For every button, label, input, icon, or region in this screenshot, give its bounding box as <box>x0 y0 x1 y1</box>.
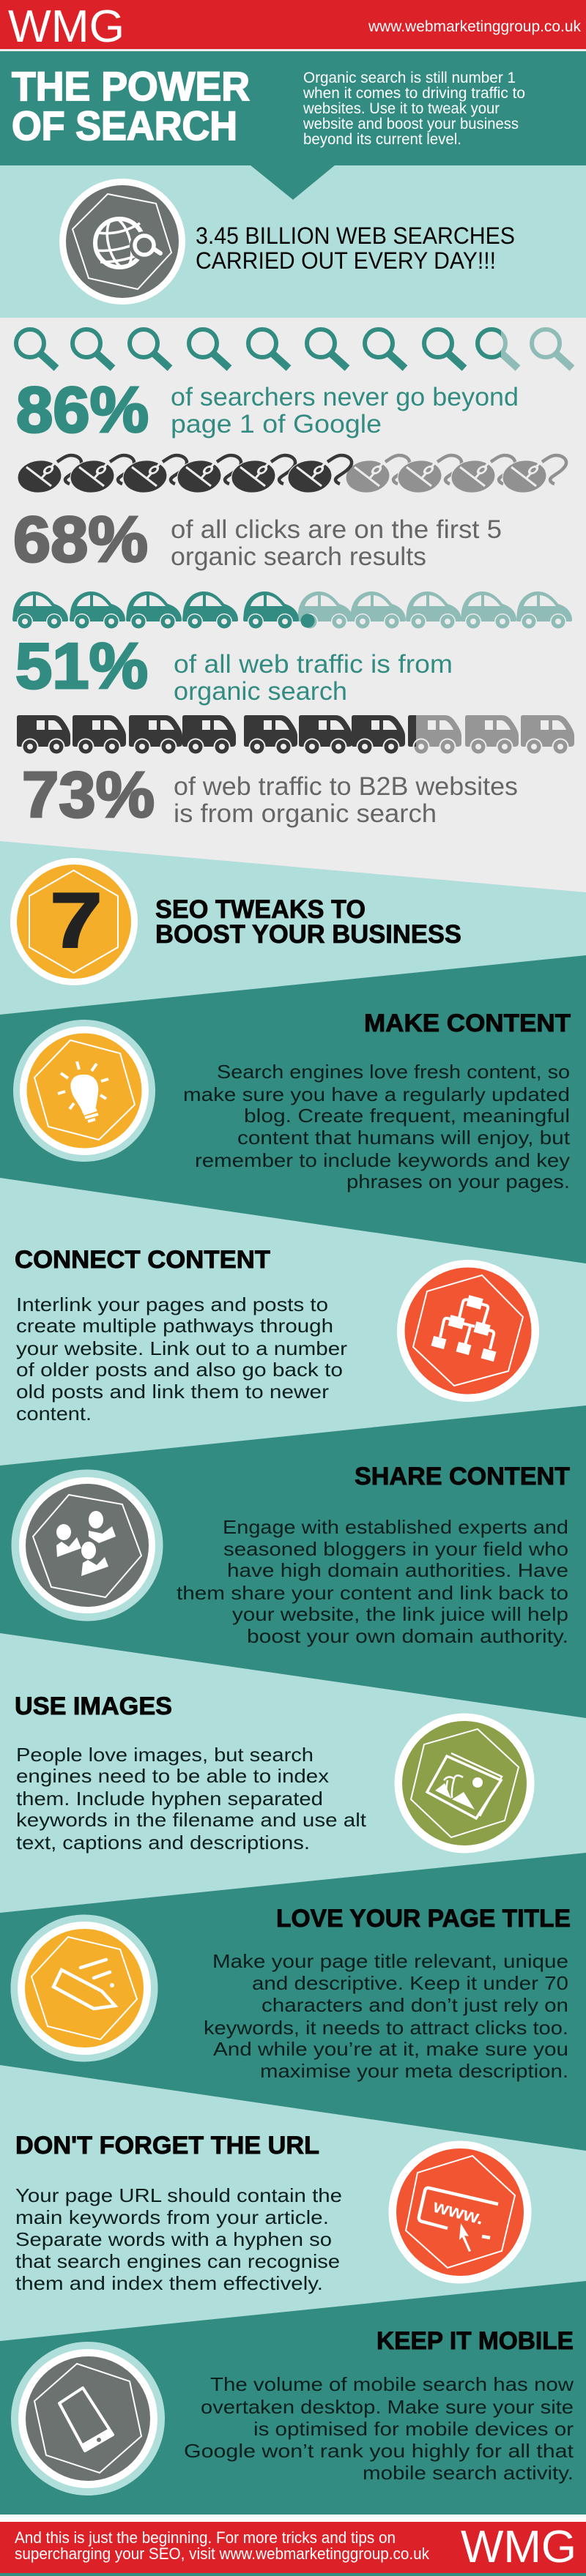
text: keep it mobile: is optimised for mobile devices or <box>253 2418 574 2440</box>
intro text: website and boost your business <box>303 116 519 132</box>
text: use images: engines need to be able to index <box>16 1765 329 1787</box>
footer text <box>15 2528 430 2563</box>
heading: don't forget the url: DON'T FORGET THE URL <box>15 2132 319 2159</box>
text: don't forget the url <box>15 2184 342 2294</box>
text: share content: have high domain authorities. Have <box>227 1559 568 1581</box>
logo: WMG: WMG <box>8 1 125 52</box>
panel: make content <box>0 955 586 1263</box>
stat: 51%: organic search <box>174 677 347 706</box>
footer text: And this is just the beginning. For more tricks and tips on <box>15 2528 396 2547</box>
panel: love your page title <box>0 1853 586 2151</box>
stat: 86% <box>16 373 519 446</box>
text: make content: remember to include keywords and key <box>195 1149 570 1171</box>
website address: www.webmarketinggroup.co.uk <box>368 18 581 35</box>
panel: title <box>0 51 586 200</box>
stat: 68%: of all clicks are on the first 5 <box>171 515 502 544</box>
text: love your page title <box>204 1950 568 2082</box>
text: use images: People love images, but search <box>16 1744 314 1766</box>
text: share content: seasoned bloggers in your field who <box>223 1538 568 1560</box>
text: use images: keywords in the filename and use alt <box>16 1809 367 1831</box>
heading: SEO tweaks: BOOST YOUR BUSINESS <box>155 920 461 949</box>
text: connect content: Interlink your pages and posts to <box>16 1293 328 1315</box>
stat: 86%: of searchers never go beyond <box>171 383 519 411</box>
intro text: beyond its current level. <box>303 131 461 148</box>
panel: keep it mobile <box>0 2281 586 2576</box>
text: don't forget the url: that search engines can recognise <box>15 2250 340 2272</box>
heading: make content: MAKE CONTENT <box>364 1009 571 1037</box>
stat: 68% <box>13 503 502 575</box>
text: connect content: content. <box>16 1403 92 1425</box>
text: don't forget the url: them and index them effectively. <box>15 2272 323 2294</box>
header bar <box>0 0 586 52</box>
text: keep it mobile: Google won’t rank you highly for all that <box>184 2440 574 2462</box>
text: love your page title: keywords, it needs to attract clicks too. <box>204 2017 568 2039</box>
panel: share content <box>0 1405 586 1718</box>
text: use images: them. Include hyphen separated <box>16 1788 323 1810</box>
stat: 73% <box>22 758 518 831</box>
text: make content <box>183 1061 571 1192</box>
panel: use images <box>15 1692 535 1853</box>
stat: 68%: 68% <box>13 503 148 575</box>
stat: 73%: of web traffic to B2B websites <box>174 772 518 801</box>
icon: number 7 badge <box>10 858 138 985</box>
icon: light bulb <box>13 1020 155 1162</box>
icon: people <box>12 1470 163 1621</box>
text: connect content: your website. Link out to a number <box>16 1337 347 1359</box>
heading: keep it mobile: KEEP IT MOBILE <box>377 2327 574 2355</box>
text: share content: your website, the link juice will help <box>232 1603 568 1625</box>
panel: web searches banner <box>0 165 586 318</box>
icon: sitemap <box>397 1260 539 1402</box>
footer logo: WMG: WMG <box>461 2522 576 2572</box>
text: love your page title: Make your page title relevant, unique <box>212 1950 568 1972</box>
heading: connect content: CONNECT CONTENT <box>15 1246 270 1274</box>
headline: 3.45 billion <box>196 223 515 274</box>
heading: love your page title: LOVE YOUR PAGE TITLE <box>276 1905 571 1933</box>
icon: smartphone <box>11 2342 165 2495</box>
text: love your page title: maximise your meta description. <box>260 2060 568 2082</box>
stat: 73%: 73% <box>22 758 155 831</box>
text: make content: Search engines love fresh content, so <box>217 1061 570 1083</box>
icon: tag pencil <box>10 1915 158 2061</box>
text: connect content: old posts and link them to newer <box>16 1381 329 1403</box>
icon row: vans 73% <box>17 715 574 755</box>
icon: www browser: www. <box>430 2195 486 2229</box>
text: keep it mobile: mobile search activity. <box>363 2462 574 2484</box>
text: share content: them share your content and link back to <box>177 1582 568 1604</box>
intro text <box>303 70 525 148</box>
stat: 86%: page 1 of Google <box>171 410 382 438</box>
text: love your page title: And while you’re at it, make sure you <box>213 2038 568 2060</box>
text: don't forget the url: Your page URL should contain the <box>15 2184 342 2206</box>
panel: don't forget the URL <box>15 2132 532 2294</box>
intro text: Organic search is still number 1 <box>303 70 516 86</box>
text: share content: boost your own domain authority. <box>247 1625 568 1647</box>
stat: 51% <box>15 630 453 706</box>
stat: 51%: of all web traffic is from <box>174 650 453 679</box>
icon row: computer mice 68% <box>16 455 566 495</box>
stat: 51%: 51% <box>15 630 148 702</box>
headline: 3.45 billion: 3.45 BILLION WEB SEARCHES <box>196 223 515 249</box>
text: connect content <box>16 1293 347 1425</box>
title <box>12 63 250 149</box>
text: keep it mobile <box>184 2373 574 2484</box>
text: love your page title: and descriptive. Keep it under 70 <box>252 1972 568 1994</box>
stat: 68%: organic search results <box>171 542 426 571</box>
stat: 73%: is from organic search <box>174 799 437 828</box>
text: share content: Engage with established experts and <box>223 1516 568 1538</box>
text: love your page title: characters and don’t just rely on <box>262 1994 568 2016</box>
text: connect content: create multiple pathways through <box>16 1315 333 1337</box>
text: don't forget the url: Separate words with a hyphen so <box>15 2228 332 2250</box>
intro text: websites. Use it to tweak your <box>303 100 500 117</box>
icon row: cars 51% <box>12 591 572 630</box>
text: make content: phrases on your pages. <box>346 1171 570 1192</box>
text: keep it mobile: The volume of mobile search has now <box>210 2373 574 2395</box>
text: share content <box>177 1516 568 1647</box>
intro text: when it comes to driving traffic to <box>303 85 525 102</box>
text: use images <box>16 1744 367 1853</box>
panel: light teal background of tips <box>0 841 586 2518</box>
headline: 3.45 billion: CARRIED OUT EVERY DAY!!! <box>196 247 496 274</box>
icon: number 7 badge: 7 <box>50 876 103 964</box>
panel: connect content <box>15 1246 539 1425</box>
footer <box>0 2515 586 2573</box>
text: don't forget the url: main keywords from your article. <box>15 2206 329 2228</box>
footer text: supercharging your SEO, visit www.webmarketinggroup.co.uk <box>15 2545 430 2563</box>
heading: use images: USE IMAGES <box>15 1692 172 1720</box>
text: connect content: of older posts and also go back to <box>16 1359 343 1381</box>
heading: SEO tweaks: SEO TWEAKS TO <box>155 895 366 924</box>
heading: share content: SHARE CONTENT <box>355 1463 570 1490</box>
text: make content: blog. Create frequent, meaningful <box>244 1105 570 1127</box>
text: make content: content that humans will enjoy, but <box>237 1127 571 1149</box>
icon: photo <box>394 1713 535 1853</box>
icon: globe search badge <box>59 179 185 305</box>
title: OF SEARCH <box>12 102 237 149</box>
title: THE POWER <box>12 63 250 109</box>
heading: SEO tweaks <box>155 895 461 949</box>
text: keep it mobile: overtaken desktop. Make sure your site <box>201 2396 574 2418</box>
text: use images: text, captions and descriptions. <box>16 1832 310 1853</box>
text: make content: make sure you have a regularly updated <box>183 1083 570 1105</box>
stat: 86%: 86% <box>16 373 149 446</box>
icon: www browser <box>388 2140 532 2284</box>
icon row: magnifiers 86% <box>16 329 572 368</box>
